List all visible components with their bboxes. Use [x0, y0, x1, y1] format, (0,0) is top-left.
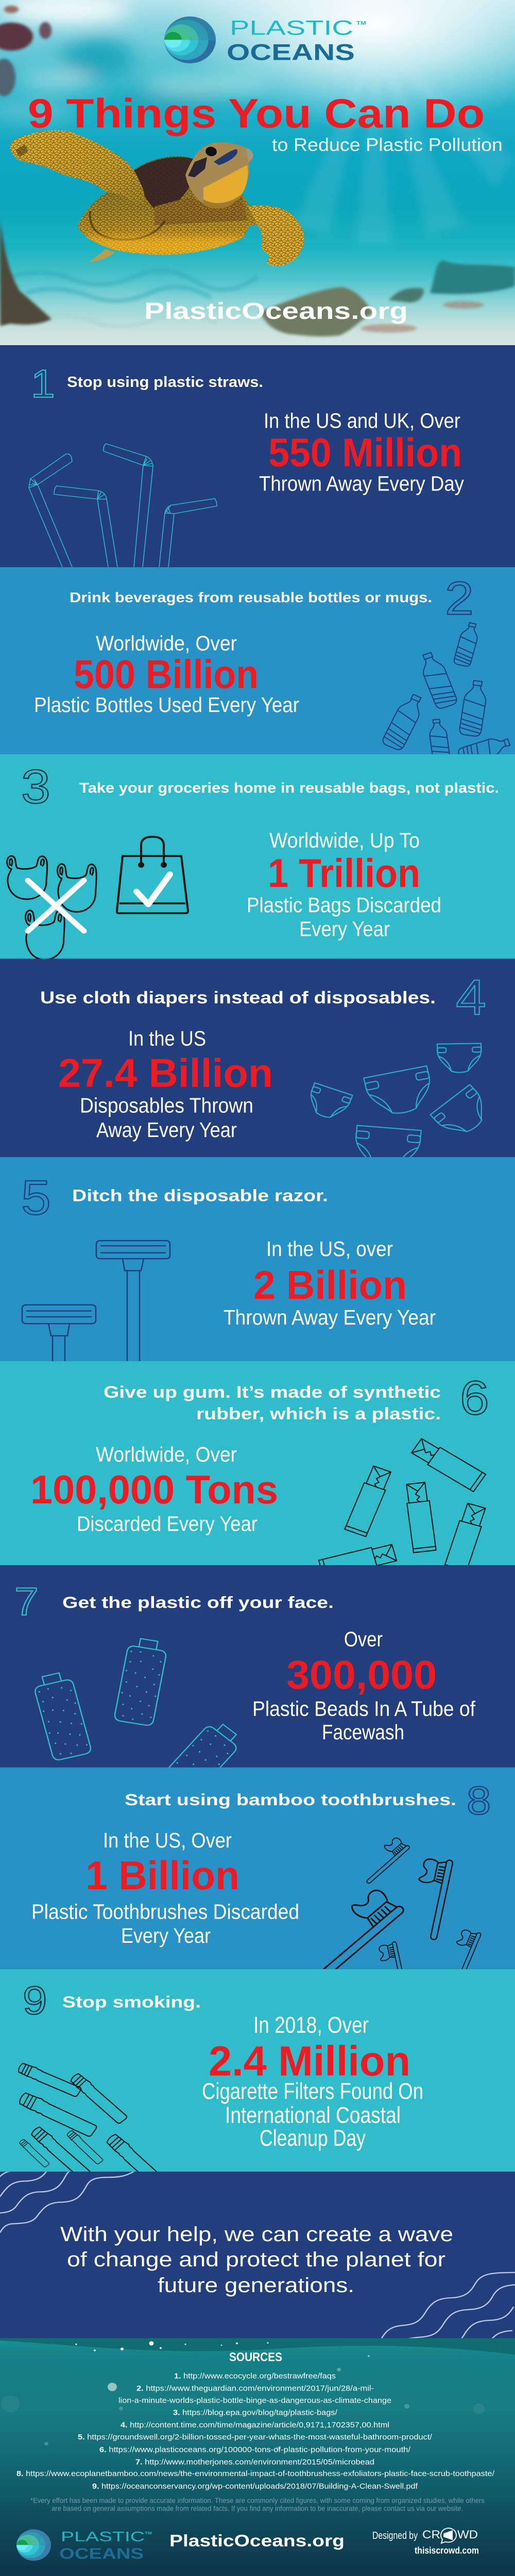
stat detail: Discarded Every Year	[77, 1512, 258, 1536]
reddish seaweed on rocks	[360, 301, 484, 332]
heading: Take your groceries home in reusable bags, not plastic.	[79, 781, 499, 796]
panel background	[0, 1157, 515, 1361]
bag handle ends	[138, 862, 167, 868]
designer website: thisiscrowd.com	[415, 2546, 479, 2556]
white check	[136, 874, 170, 904]
designer credit	[372, 2528, 479, 2556]
source 7: 7. http://www.motherjones.com/environment/2015/05/microbead	[135, 2458, 374, 2466]
number 8: 8	[467, 1778, 491, 1823]
dark coral at top left	[0, 6, 52, 96]
stat intro: In the US and UK, Over	[264, 409, 460, 433]
stat number: 2 Billion	[253, 1263, 407, 1308]
stat intro: Over	[344, 1628, 383, 1651]
statistic	[252, 1628, 476, 1744]
turtle left flipper	[10, 130, 144, 207]
number 1: 1	[31, 362, 55, 406]
footer panel: sources	[0, 2338, 515, 2576]
heading: Stop using plastic straws.	[67, 374, 263, 391]
sun rays	[296, 84, 514, 245]
crowd word end: WD	[457, 2528, 478, 2541]
panel 3: bags	[0, 754, 515, 960]
stat detail: Plastic Toothbrushes Discarded	[31, 1900, 299, 1924]
subtitle: to Reduce Plastic Pollution	[272, 134, 503, 155]
stat intro: Worldwide, Up To	[269, 829, 420, 853]
panel background	[0, 1969, 515, 2172]
panel background	[0, 959, 515, 1157]
panel background	[0, 345, 515, 567]
white cross	[28, 880, 84, 931]
statistic	[259, 409, 464, 496]
stat detail: Disposables Thrown	[80, 1094, 253, 1117]
stat detail line 2: Away Every Year	[96, 1118, 237, 1142]
panel 7: face wash	[0, 1565, 515, 1806]
stat detail line 2: Facewash	[322, 1721, 404, 1744]
logo mark	[16, 2529, 51, 2561]
panel background	[0, 754, 515, 959]
stat detail: Plastic Beads In A Tube of	[252, 1697, 476, 1721]
heading: Drink beverages from reusable bottles or mugs.	[70, 590, 432, 606]
panel 9: cigarettes	[0, 1969, 515, 2192]
icon: crowd megaphone	[441, 2528, 456, 2543]
panel 5: razors	[0, 1157, 515, 1361]
turtle	[10, 130, 309, 272]
heading: Get the plastic off your face.	[62, 1594, 334, 1612]
panel: call to action	[0, 2160, 515, 2359]
panel 4: diapers	[0, 959, 515, 1172]
icon: gum packs	[319, 1437, 487, 1580]
stat number: 1 Trillion	[268, 851, 420, 896]
rock: left	[0, 221, 52, 326]
logo word: plastic: PLASTIC	[61, 2529, 145, 2544]
stat number: 27.4 Billion	[58, 1051, 273, 1096]
source 8: 8. https://www.ecoplanetbamboo.com/news/the-environmental-impact-of-toothbrushess-exfoliators-plastic-face-scrub-toothpaste/	[16, 2470, 495, 2478]
icon: cigarette butts	[17, 2062, 171, 2192]
statistic	[34, 632, 299, 717]
source 1: 1. http://www.ecocycle.org/bestrawfree/faqs	[174, 2372, 336, 2381]
stat intro: Worldwide, Over	[96, 1443, 237, 1466]
icon: razors	[22, 1241, 170, 1361]
statistic	[30, 1443, 278, 1536]
stat intro: In 2018, Over	[253, 2012, 369, 2038]
icon: face wash tubes	[31, 1637, 245, 1806]
panel background	[0, 2172, 515, 2338]
stat intro: In the US	[128, 1027, 206, 1050]
title: 9 Things You Can Do	[28, 90, 485, 137]
sunlight glow	[170, 0, 515, 131]
surface bubbles and specks	[75, 2341, 370, 2371]
stat detail line 3: Cleanup Day	[260, 2125, 366, 2151]
logo trademark: TM	[145, 2531, 152, 2535]
stat detail line 2: International Coastal	[225, 2103, 401, 2128]
hero panel: sea turtle photo	[0, 0, 515, 345]
crowd word start: CR	[422, 2528, 440, 2541]
heading line 1: Give up gum. It’s made of synthetic	[104, 1383, 441, 1402]
closing message	[60, 2223, 453, 2297]
icon: diapers	[304, 1043, 495, 1172]
designed by: Designed by	[372, 2530, 418, 2541]
icon: plastic bags crossed out	[7, 856, 96, 960]
seabed ripples	[10, 270, 258, 327]
statistic	[31, 1829, 299, 1947]
source 2 continued: lion-a-minute-worlds-plastic-bottle-binge-as-dangerous-as-climate-change	[118, 2397, 391, 2405]
stat detail: Thrown Away Every Year	[224, 1306, 436, 1330]
panel 6: gum	[0, 1361, 515, 1580]
stat number: 550 Million	[268, 430, 462, 475]
logo	[164, 16, 366, 65]
heading: Use cloth diapers instead of disposables.	[40, 988, 436, 1007]
bag outline	[117, 837, 188, 913]
stat intro: In the US, Over	[103, 1829, 232, 1853]
water surface band	[0, 2338, 515, 2354]
plastic bags	[7, 856, 96, 960]
statistic	[202, 2012, 423, 2151]
number 3: 3	[21, 760, 50, 814]
bokeh spots	[1, 2383, 485, 2450]
stat detail line 2: Every Year	[121, 1924, 211, 1947]
statistic	[247, 829, 441, 941]
turtle tail	[89, 249, 115, 263]
statistic	[58, 1027, 273, 1142]
turtle head	[185, 142, 253, 208]
panel 2: bottles	[0, 567, 515, 765]
icon: bendy straws	[29, 444, 217, 567]
ocean background	[0, 0, 515, 345]
sources heading: SOURCES	[229, 2350, 282, 2364]
turtle body and right flipper	[77, 156, 304, 266]
number 7: 7	[14, 1580, 39, 1624]
tall razor	[96, 1241, 170, 1361]
footer website: PlasticOceans.org	[169, 2532, 345, 2550]
number 6: 6	[460, 1371, 489, 1425]
statistic	[224, 1238, 436, 1330]
stat intro: In the US, over	[266, 1238, 393, 1261]
stat detail: Plastic Bags Discarded	[247, 894, 441, 917]
underwater background	[0, 2338, 515, 2576]
disclaimer line 2: are based on general assumptions made from related facts. If you find any information to be inaccurate, please contact us via our website.	[52, 2505, 463, 2513]
heading: Start using bamboo toothbrushes.	[125, 1791, 456, 1809]
source 9: 9. https://oceanconservancy.org/wp-content/uploads/2018/07/Building-A-Clean-Swell.pdf	[92, 2482, 418, 2490]
panel background	[0, 1767, 515, 1969]
short razor	[22, 1305, 96, 1361]
waves: top left	[0, 2160, 135, 2233]
number 2: 2	[445, 572, 474, 625]
footer logo	[16, 2529, 152, 2562]
stat number: 500 Billion	[74, 652, 259, 697]
panel background	[0, 1361, 515, 1565]
stat number: 2.4 Million	[209, 2038, 410, 2085]
stat detail: Thrown Away Every Day	[259, 472, 464, 496]
stat detail line 2: Every Year	[299, 918, 390, 941]
number 5: 5	[21, 1171, 51, 1225]
panel 1: straws	[0, 345, 515, 567]
rock: right	[389, 260, 515, 302]
rock: centre	[260, 287, 373, 336]
heading line 2: rubber, which is a plastic.	[196, 1404, 441, 1423]
logo word: plastic: PLASTIC	[230, 16, 353, 39]
panel background	[0, 1565, 515, 1767]
heading: Ditch the disposable razor.	[72, 1187, 328, 1205]
website: PlasticOceans.org	[144, 298, 408, 325]
logo word: oceans: OCEANS	[59, 2545, 144, 2562]
message line 3: future generations.	[158, 2274, 354, 2297]
source 3: 3. https://blog.epa.gov/blog/tag/plastic-bags/	[173, 2409, 338, 2417]
sources list	[16, 2372, 495, 2490]
heading: Stop smoking.	[62, 1993, 201, 2011]
panel background	[0, 567, 515, 754]
icon: toothbrushes	[291, 1835, 482, 1995]
logo mark	[164, 16, 216, 63]
message line 2: of change and protect the planet for	[67, 2248, 445, 2271]
source 6: 6. https://www.plasticoceans.org/100000-tons-of-plastic-pollution-from-your-mouth/	[99, 2446, 411, 2454]
source 5: 5. https://groundswell.org/2-billion-tossed-per-year-whats-the-most-wasteful-bathroom-product/	[78, 2433, 433, 2442]
disclaimer	[30, 2497, 485, 2513]
icon: plastic bottles	[381, 621, 512, 765]
panel 8: toothbrushes	[0, 1767, 515, 1995]
stat number: 1 Billion	[85, 1854, 239, 1898]
stat detail: Plastic Bottles Used Every Year	[34, 693, 299, 717]
stat number: 300,000	[286, 1653, 437, 1698]
number 4: 4	[456, 970, 486, 1025]
surface light patches	[0, 0, 268, 123]
source 2: 2. https://www.theguardian.com/environment/2017/jun/28/a-mil-	[136, 2384, 374, 2393]
heading	[104, 1383, 441, 1423]
stat detail: Cigarette Filters Found On	[202, 2078, 423, 2104]
number 9: 9	[23, 1978, 47, 2023]
waves: bottom right	[381, 2273, 515, 2359]
logo trademark: TM	[356, 21, 366, 26]
stat intro: Worldwide, Over	[96, 632, 237, 655]
source 4: 4. http://content.time.com/time/magazine/article/0,9171,1702357,00.html	[121, 2421, 389, 2429]
stat number: 100,000 Tons	[30, 1467, 278, 1512]
logo word: oceans: OCEANS	[227, 40, 355, 65]
icon: reusable bag with check	[117, 837, 188, 913]
message line 1: With your help, we can create a wave	[60, 2223, 453, 2246]
